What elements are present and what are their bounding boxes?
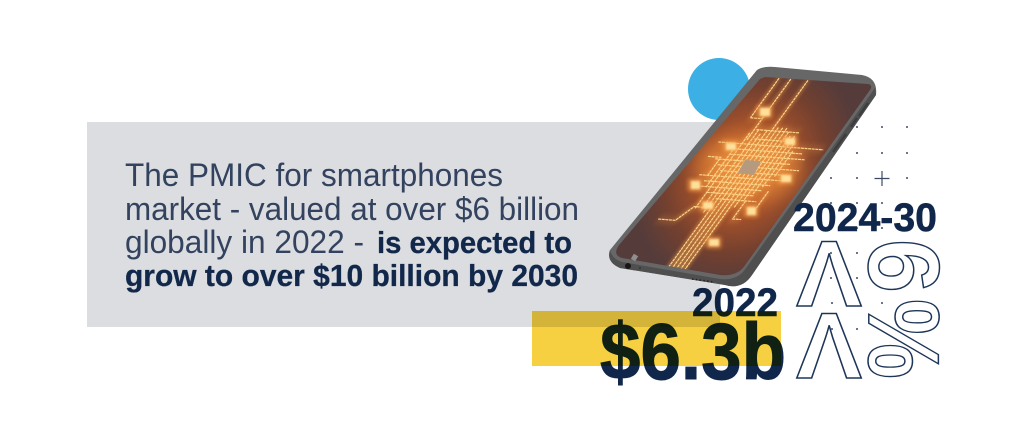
text block: market summary: is expected to: [377, 225, 572, 260]
smartphone illustration: [609, 67, 876, 286]
dot grid: [830, 126, 908, 330]
yellow highlight bar: [532, 311, 781, 366]
headphone jack and speaker: [625, 255, 714, 282]
side buttons: [833, 103, 868, 152]
blue circle: [688, 58, 750, 120]
phone body: [609, 67, 876, 286]
text block: market summary: grow to over $10 billion by 2030: [125, 258, 578, 293]
outline chevrons: Λ: [796, 222, 862, 326]
text block: market summary: market - valued at over $6 billion: [125, 191, 579, 227]
text block: market summary: globally in 2022 -: [125, 224, 364, 260]
outline rotated value: 6%: 6: [848, 239, 961, 293]
outline rotated value: 6%: [847, 239, 961, 379]
text block: market summary: The PMIC for smartphones: [125, 157, 503, 193]
circuit traces on screen: [656, 78, 825, 270]
value: $6.3b: $6.3b: [600, 307, 786, 396]
text block: market summary: [125, 157, 579, 293]
label: 2022: 2022: [692, 281, 778, 325]
phone screen: [616, 77, 871, 275]
outline rotated value: 6%: %: [847, 299, 960, 379]
panel: grey text background: [87, 122, 720, 327]
icon: plus: [874, 171, 890, 186]
outline chevrons: [796, 222, 862, 398]
outline chevrons: Λ: [796, 294, 862, 398]
central chip: [738, 160, 761, 175]
label: 2024-30: 2024-30: [793, 196, 937, 240]
phone lower edge: [609, 88, 876, 286]
